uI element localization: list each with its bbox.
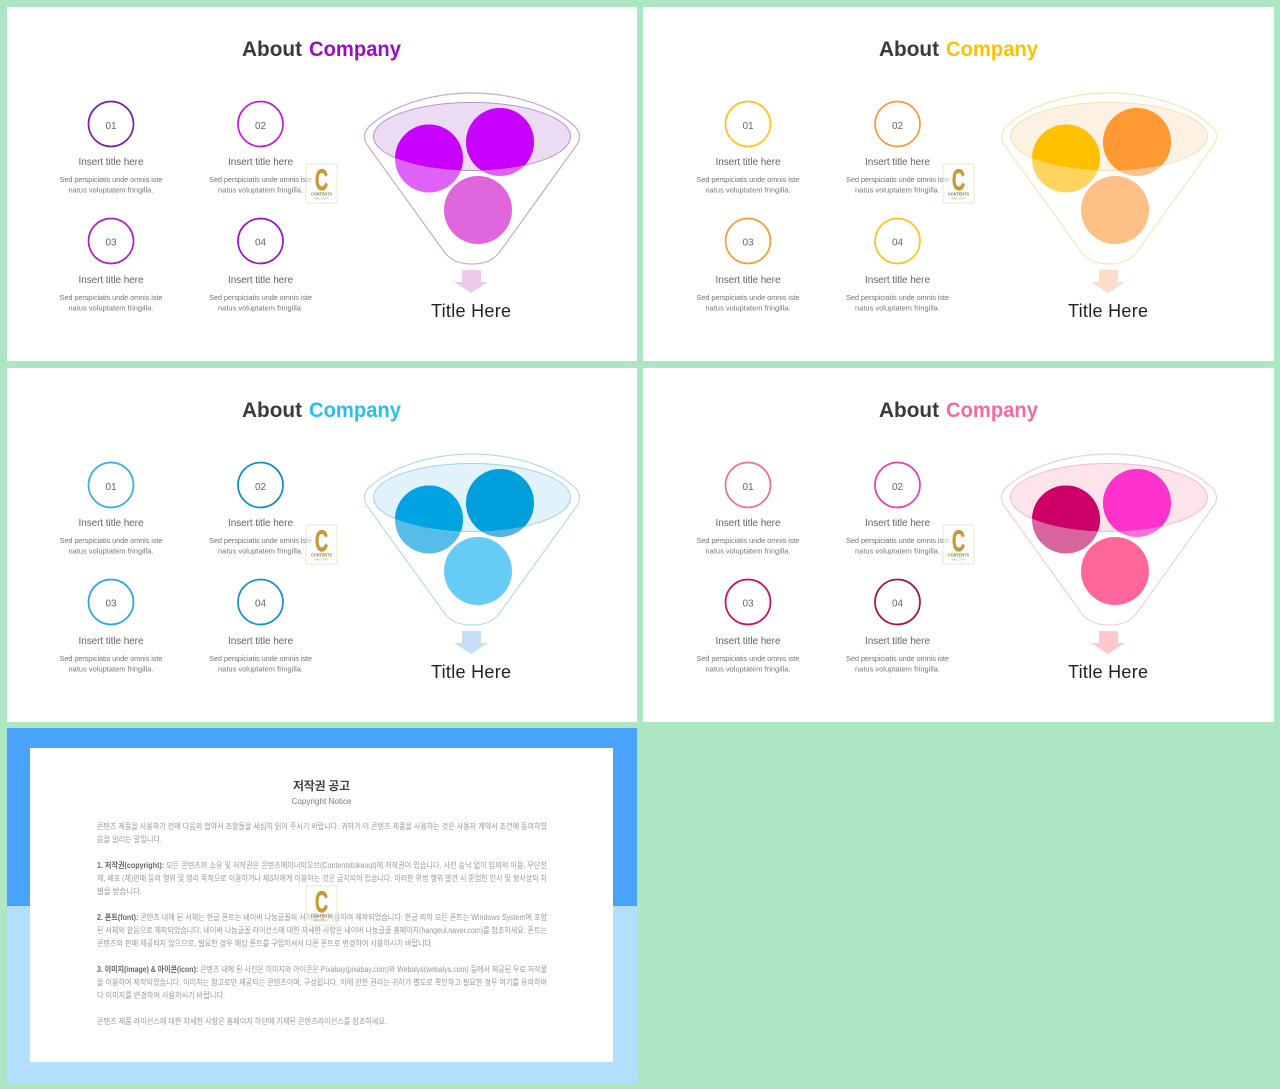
item 01: [696, 102, 800, 194]
item 02: 02: [892, 482, 903, 493]
item 04: natus voluptatem fringilla.: [855, 304, 940, 312]
item 04: Sed perspiciatis unde omnis iste: [846, 293, 949, 302]
item 02: Insert title here: [865, 518, 930, 529]
section 1 text: [97, 860, 547, 896]
funnel diagram: [365, 93, 579, 264]
item 01: 01: [105, 121, 117, 132]
funnel title: Title Here: [431, 662, 511, 682]
watermark logo: C: [315, 525, 328, 558]
item 02: Insert title here: [228, 157, 293, 168]
copyright heading: 저작권 공고: [293, 778, 350, 793]
heading: [242, 38, 401, 61]
heading: Company: [946, 38, 1038, 61]
item 04: 04: [892, 238, 903, 248]
item 03: Sed perspiciatis unde omnis iste: [60, 654, 162, 663]
item 04: 04: [892, 598, 903, 610]
item 02: Insert title here: [865, 157, 930, 168]
item 02: natus voluptatem fringilla.: [855, 546, 940, 556]
item 03: natus voluptatem fringilla.: [68, 304, 154, 312]
section 3 text: 3. 이미지(image) & 아이콘(icon): 콘텐츠 내에 된 사진은 이미지와 아이콘은 Pixabay(pixabay.com)와 Webalys(webalys.com) 등에서 제공된 무료 저작물: [97, 964, 547, 974]
section 1 text: 1. 저작권(copyright): 모든 콘텐츠의 소유 및 저작권은 콘텐츠메이너이오브(Contentstokeout)에 저작권이 있습니다. 사전 승낙 없이 임의적 이용, 무단전: [97, 860, 547, 870]
panel: pink slide: [643, 368, 1274, 722]
item 01: Sed perspiciatis unde omnis iste: [696, 175, 800, 184]
panel: blue slide: [7, 368, 637, 722]
heading: Company: [309, 38, 401, 61]
watermark logo: CONTENTS: [948, 552, 969, 558]
closing text: 콘텐츠 제품 라이선스에 대한 자세한 사항은 홈페이지 하단에 기재된 콘텐츠라이선스를 참조하세요.: [97, 1016, 387, 1026]
item 03: Insert title here: [716, 275, 781, 286]
copyright subheading: Copyright Notice: [292, 797, 352, 806]
item 02: Sed perspiciatis unde omnis iste: [209, 175, 312, 184]
item 01: Insert title here: [716, 157, 781, 168]
watermark logo: [943, 164, 974, 203]
item 01: Insert title here: [716, 518, 781, 529]
item 01: [60, 102, 162, 194]
section 2 text: 2. 폰트(font): 콘텐츠 내에 된 서체는 한글 폰트는 네이버 나눔글꼴의 서체들을 사용하여 제작되었습니다. 한글 외의 모든 폰트는 Windows System에 포함: [97, 912, 548, 922]
watermark logo: C: [952, 525, 965, 558]
heading: [879, 38, 1038, 61]
item 04: [209, 218, 312, 312]
item 04: Sed perspiciatis unde omnis iste: [846, 654, 949, 663]
item 04: [846, 218, 949, 312]
item 02: natus voluptatem fringilla.: [855, 186, 940, 194]
item 01: [60, 462, 162, 556]
item 04: [209, 580, 312, 674]
section 1 text: 벌을 받습니다.: [97, 886, 142, 896]
watermark logo: CONTENTS: [948, 192, 969, 196]
item 04: Insert title here: [228, 275, 293, 286]
item 03: [60, 218, 162, 312]
section 2 text: 콘텐츠의 판매 제공되지 않으므로, 필요한 경우 해당 폰트를 구입하셔서 다른 폰트로 변경하여 사용하시기 바랍니다.: [97, 938, 433, 948]
item 02: [846, 102, 949, 194]
funnel diagram: [1002, 93, 1216, 264]
item 03: 03: [742, 238, 754, 248]
watermark logo: CONTENTS: [311, 192, 332, 196]
item 01: Sed perspiciatis unde omnis iste: [60, 175, 162, 184]
item 01: 01: [105, 482, 117, 493]
watermark logo: [943, 525, 974, 564]
heading: About: [242, 399, 302, 422]
item 04: natus voluptatem fringilla.: [855, 664, 940, 674]
funnel diagram: [1002, 454, 1216, 625]
item 04: Insert title here: [228, 636, 293, 647]
funnel title: Title Here: [1068, 301, 1148, 321]
funnel diagram: [365, 454, 579, 625]
item 01: Sed perspiciatis unde omnis iste: [60, 536, 162, 545]
intro text: 음을 알리는 말입니다.: [97, 834, 162, 844]
section 3 text: 을 이용하여 제작되었습니다. 이미지는 참고로만 제공되는 콘텐츠이며, 구성됩니다. 이에 관한 권리는 귀하가 별도로 확인하고 필요한 경우 여기를 유의하여: [97, 977, 547, 987]
section 3 text: 다 이미지를 변경하여 사용하시기 바랍니다.: [97, 990, 225, 1000]
watermark logo: MAIL COPY: [314, 918, 329, 922]
item 03: Insert title here: [78, 636, 144, 647]
panel: purple slide: [7, 7, 637, 361]
arrow: [454, 270, 488, 293]
item 01: Insert title here: [78, 157, 144, 168]
watermark logo: MAIL COPY: [951, 196, 966, 200]
heading: About: [879, 38, 939, 61]
item 01: natus voluptatem fringilla.: [706, 186, 790, 194]
watermark logo: C: [315, 886, 328, 919]
panel: yellow slide: [643, 7, 1274, 361]
watermark logo: C: [315, 164, 328, 197]
item 03: [696, 580, 800, 674]
item 03: 03: [742, 598, 754, 610]
item 02: Insert title here: [228, 518, 293, 529]
funnel title: Title Here: [1068, 662, 1148, 682]
item 01: 01: [742, 121, 754, 132]
item 02: natus voluptatem fringilla.: [218, 186, 303, 194]
intro text: 콘텐츠 제품을 사용하기 전에 다음의 협약서 조항들을 세심히 읽어 주시기 바랍니다. 귀하가 이 콘텐츠 제품을 사용하는 것은 사용자 계약서 조건에 동의하였: [97, 821, 548, 831]
item 03: 03: [105, 238, 117, 248]
item 01: Insert title here: [78, 518, 144, 529]
funnel title: Title Here: [431, 301, 511, 321]
watermark logo: [306, 525, 337, 564]
section 1 text: 재, 배포 (재)판매 등의 행위 및 영리 목적으로 이용하거나 제3자에게 이용하는 것은 금지되어 있습니다. 이러한 위법 행위 발견 시 준엄한 민사 및 형사상의 처: [97, 873, 547, 883]
item 04: 04: [255, 238, 266, 248]
watermark logo: [306, 886, 337, 925]
item 02: 02: [892, 121, 903, 132]
item 02: [209, 462, 312, 556]
item 04: natus voluptatem fringilla.: [218, 304, 303, 312]
section 2 text: [97, 912, 548, 948]
heading: Company: [309, 399, 401, 422]
arrow: [1091, 631, 1125, 654]
watermark logo: CONTENTS: [311, 914, 332, 918]
watermark logo: MAIL COPY: [314, 558, 329, 562]
item 01: Sed perspiciatis unde omnis iste: [696, 536, 800, 545]
item 04: Insert title here: [865, 636, 930, 647]
item 02: Sed perspiciatis unde omnis iste: [846, 175, 949, 184]
item 04: Sed perspiciatis unde omnis iste: [209, 293, 312, 302]
item 01: [696, 462, 800, 556]
heading: [242, 399, 401, 422]
arrow: [454, 631, 488, 654]
heading: About: [242, 38, 302, 61]
item 02: Sed perspiciatis unde omnis iste: [846, 536, 949, 545]
item 04: Insert title here: [865, 275, 930, 286]
item 02: natus voluptatem fringilla.: [218, 546, 303, 556]
item 02: [209, 102, 312, 194]
item 01: natus voluptatem fringilla.: [706, 546, 790, 556]
arrow: [1091, 270, 1125, 293]
heading: Company: [946, 399, 1038, 422]
item 03: natus voluptatem fringilla.: [706, 304, 790, 312]
item 03: natus voluptatem fringilla.: [706, 664, 790, 674]
item 01: 01: [742, 482, 754, 493]
item 03: Sed perspiciatis unde omnis iste: [60, 293, 162, 302]
item 04: Sed perspiciatis unde omnis iste: [209, 654, 312, 663]
section 2 text: 된 서체와 같음으로 제작되었습니다. 네이버 나눔글꼴 라이선스에 대한 자세한 사항은 네이버 나눔글꼴 홈페이지(hangeul.naver.com)를 참조하세요. 폰트는: [97, 925, 547, 935]
item 04: 04: [255, 598, 266, 610]
item 03: [60, 580, 162, 674]
item 04: natus voluptatem fringilla.: [218, 664, 303, 674]
item 02: Sed perspiciatis unde omnis iste: [209, 536, 312, 545]
item 03: Insert title here: [716, 636, 781, 647]
item 03: 03: [105, 598, 117, 610]
section 3 text: [97, 964, 547, 1000]
item 03: Insert title here: [78, 275, 144, 286]
heading: About: [879, 399, 939, 422]
item 02: [846, 462, 949, 556]
item 03: Sed perspiciatis unde omnis iste: [696, 654, 800, 663]
item 03: natus voluptatem fringilla.: [68, 664, 154, 674]
heading: [879, 399, 1038, 422]
item 03: [696, 218, 800, 312]
item 01: natus voluptatem fringilla.: [68, 546, 154, 556]
watermark logo: MAIL COPY: [951, 558, 966, 562]
panel: copyright notice slide: [7, 728, 637, 1083]
item 02: 02: [255, 121, 266, 132]
item 01: natus voluptatem fringilla.: [68, 186, 154, 194]
watermark logo: [306, 164, 337, 203]
intro text: [97, 821, 548, 844]
watermark logo: C: [952, 164, 965, 197]
item 04: [846, 580, 949, 674]
watermark logo: MAIL COPY: [314, 196, 329, 200]
watermark logo: CONTENTS: [311, 552, 332, 558]
item 03: Sed perspiciatis unde omnis iste: [696, 293, 800, 302]
item 02: 02: [255, 482, 266, 493]
